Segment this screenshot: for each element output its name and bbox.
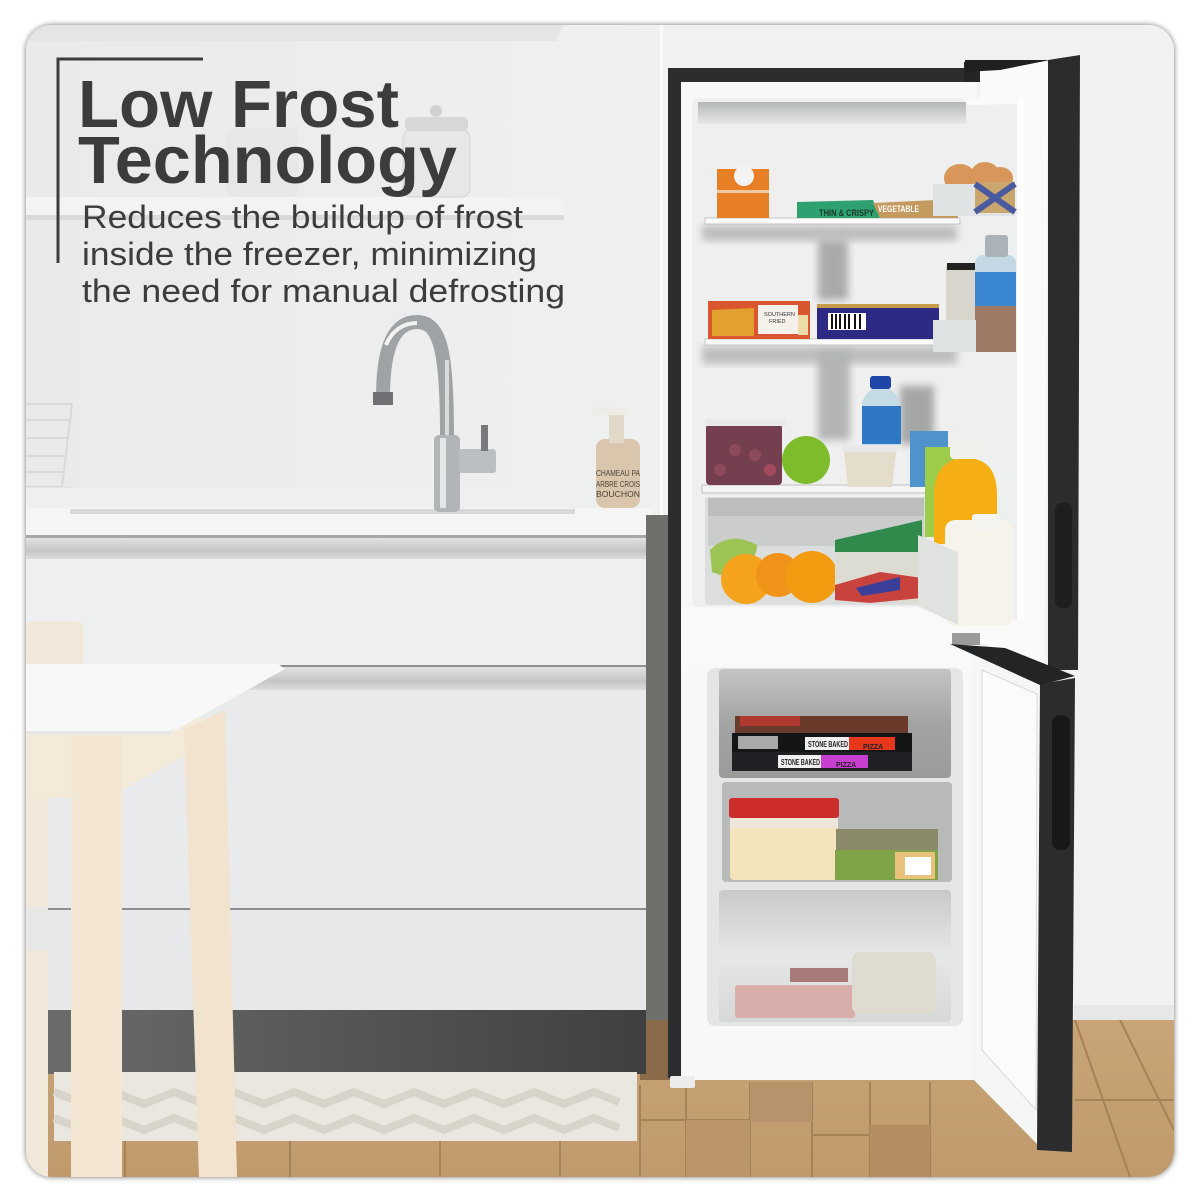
wire basket bbox=[26, 403, 73, 487]
green carton bbox=[925, 447, 955, 537]
soap bottle: BOUCHON bbox=[596, 490, 640, 499]
top drawer with pizza: STONE BAKED bbox=[781, 758, 820, 767]
description: the need for manual defrosting bbox=[82, 273, 565, 309]
fridge door top bbox=[965, 55, 1080, 670]
door bins bbox=[918, 162, 1016, 626]
top drawer with pizza: PIZZA bbox=[836, 762, 856, 769]
rug bbox=[54, 1072, 637, 1141]
table and chair bbox=[26, 621, 285, 1177]
jar bbox=[946, 263, 976, 323]
baseboard bbox=[1074, 1005, 1174, 1020]
bottom drawer bbox=[719, 890, 951, 1022]
bottle bin bbox=[933, 320, 976, 352]
heading: Low Frost bbox=[78, 67, 399, 142]
water bottle in door bbox=[975, 235, 1016, 352]
cabinets bbox=[26, 535, 646, 910]
grape box bbox=[706, 426, 782, 485]
gap beside fridge bbox=[646, 515, 668, 1020]
top drawer with pizza bbox=[719, 669, 951, 778]
soap bottle bbox=[592, 407, 641, 508]
wall shelves bbox=[26, 25, 564, 220]
eggs bbox=[944, 162, 1013, 184]
right wall bbox=[662, 25, 1174, 1020]
top drawer with pizza: STONE BAKED bbox=[808, 740, 848, 749]
top shelf: VEGETABLE bbox=[878, 204, 919, 214]
middle drawer bbox=[722, 782, 952, 882]
green apple bbox=[782, 436, 830, 484]
decorative bracket bbox=[58, 59, 203, 263]
top shelf: THIN & CRISPY bbox=[819, 208, 874, 218]
middle shelf: SOUTHERN bbox=[764, 312, 795, 318]
heading: Technology bbox=[78, 123, 457, 198]
blue carton bbox=[910, 431, 948, 487]
middle shelf bbox=[705, 301, 939, 345]
orange juice bbox=[934, 441, 997, 544]
description: inside the freezer, minimizing bbox=[82, 236, 537, 272]
egg bin bbox=[933, 182, 1015, 216]
middle shelf: FRIED bbox=[769, 319, 786, 325]
wood floor bbox=[26, 1020, 1174, 1177]
soap bottle: CHAMEAU PA bbox=[596, 469, 641, 478]
yoghurt pot bbox=[844, 452, 896, 487]
soap bottle: ARBRE CROIS bbox=[596, 480, 640, 489]
faucet bbox=[373, 322, 496, 512]
salad drawer bbox=[705, 497, 927, 605]
description: Reduces the buildup of frost bbox=[82, 199, 523, 235]
door bin front bbox=[918, 535, 958, 625]
top drawer with pizza: PIZZA bbox=[863, 744, 883, 751]
wall bbox=[26, 25, 662, 515]
water bottle bbox=[862, 376, 901, 445]
worktop bbox=[26, 488, 653, 535]
plinth bbox=[48, 1010, 646, 1074]
milk bbox=[945, 514, 1013, 626]
fridge compartment bbox=[692, 98, 966, 607]
top shelf bbox=[705, 166, 960, 224]
hinge bbox=[952, 633, 980, 645]
fridge body bbox=[668, 62, 1000, 1088]
heading bbox=[78, 67, 457, 198]
freezer door bbox=[950, 644, 1075, 1152]
glass jars on shelf bbox=[402, 105, 470, 198]
description bbox=[82, 199, 565, 309]
title block bbox=[58, 59, 565, 309]
lower shelf items bbox=[702, 376, 948, 493]
freezer compartment bbox=[707, 668, 963, 1026]
